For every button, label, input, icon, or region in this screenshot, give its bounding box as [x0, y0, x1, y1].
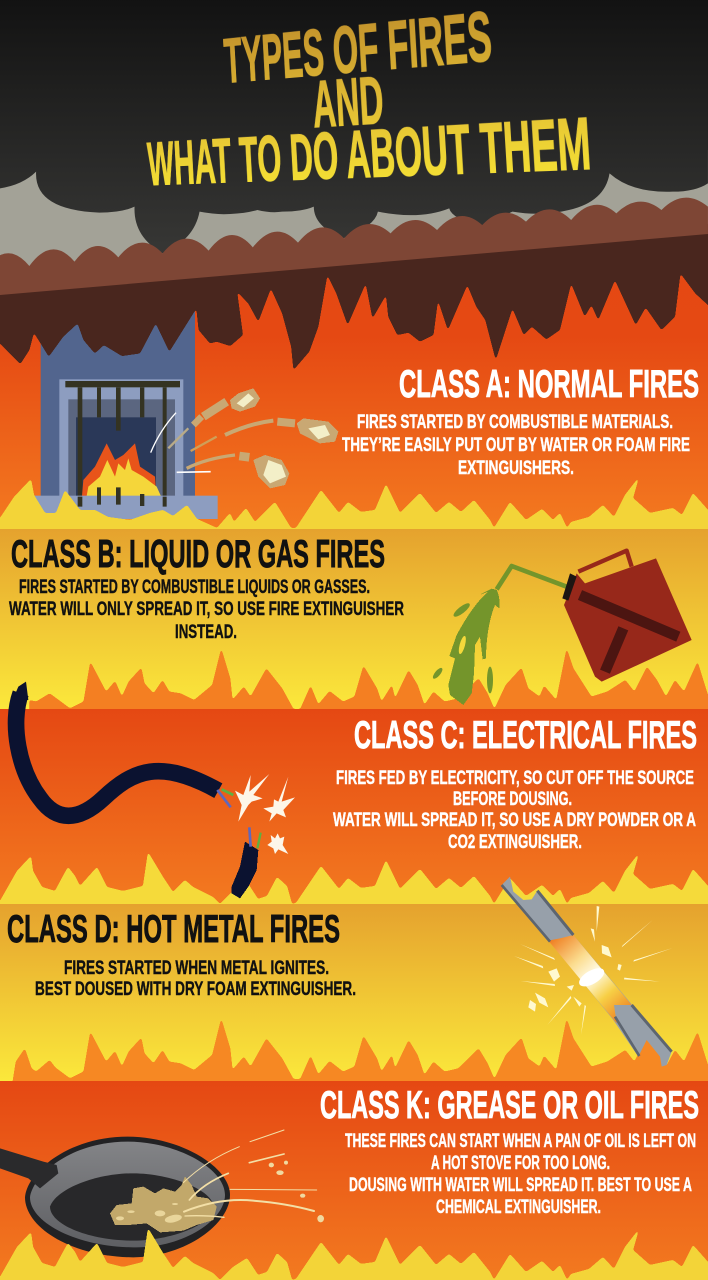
section B orange flames	[29, 648, 708, 720]
section A yellow flames	[0, 477, 708, 537]
section C background	[0, 709, 708, 904]
text: class C body: BEFORE DOUSING.	[453, 789, 572, 810]
heading: class B: CLASS B: LIQUID OR GAS FIRES	[11, 533, 385, 576]
text: class C body: CO2 EXTINGUISHER.	[448, 832, 582, 853]
text: class B body: WATER WILL ONLY SPREAD IT, SO USE FIRE EXTINGUISHER	[9, 599, 404, 620]
icon: fireplace	[33, 287, 218, 519]
icon: flying embers	[151, 388, 338, 488]
section C yellow flames	[0, 852, 708, 912]
title	[146, 0, 590, 220]
section D background	[0, 904, 708, 1081]
heading: class D: CLASS D: HOT METAL FIRES	[7, 908, 340, 951]
section D orange flames	[11, 1018, 708, 1090]
text: class D body	[35, 958, 356, 1000]
text: class A body	[342, 412, 690, 479]
burnt ceiling drips	[0, 223, 708, 370]
text: class D body: FIRES STARTED WHEN METAL IGNITES.	[64, 958, 329, 979]
brown scalloped ceiling	[0, 198, 708, 295]
text: class D body: BEST DOUSED WITH DRY FOAM EXTINGUISHER.	[35, 979, 356, 1000]
text: class K body: CHEMICAL EXTINGUISHER.	[436, 1197, 601, 1218]
section B background	[0, 529, 708, 709]
text: class B body: FIRES STARTED BY COMBUSTIBLE LIQUIDS OR GASSES.	[19, 577, 370, 598]
text: class B body	[9, 577, 404, 643]
icon: severed cable	[13, 682, 295, 898]
section A background	[0, 234, 708, 529]
text: class C body	[333, 768, 696, 853]
section K yellow flames	[0, 1228, 708, 1280]
text: class B body: INSTEAD.	[175, 622, 237, 643]
text: class K body: A HOT STOVE FOR TOO LONG.	[431, 1153, 610, 1174]
text: class K body	[345, 1131, 696, 1218]
text: class A body: EXTINGUISHERS.	[458, 458, 574, 479]
icon: frying pan with oil	[0, 1130, 324, 1257]
section K background	[0, 1081, 708, 1280]
icon: jerry can pouring fuel	[431, 551, 692, 705]
dark smoke clouds	[0, 0, 708, 253]
sky smoke background	[0, 150, 708, 310]
icon: melting metal bar	[502, 877, 673, 1067]
title: AND	[319, 61, 383, 145]
